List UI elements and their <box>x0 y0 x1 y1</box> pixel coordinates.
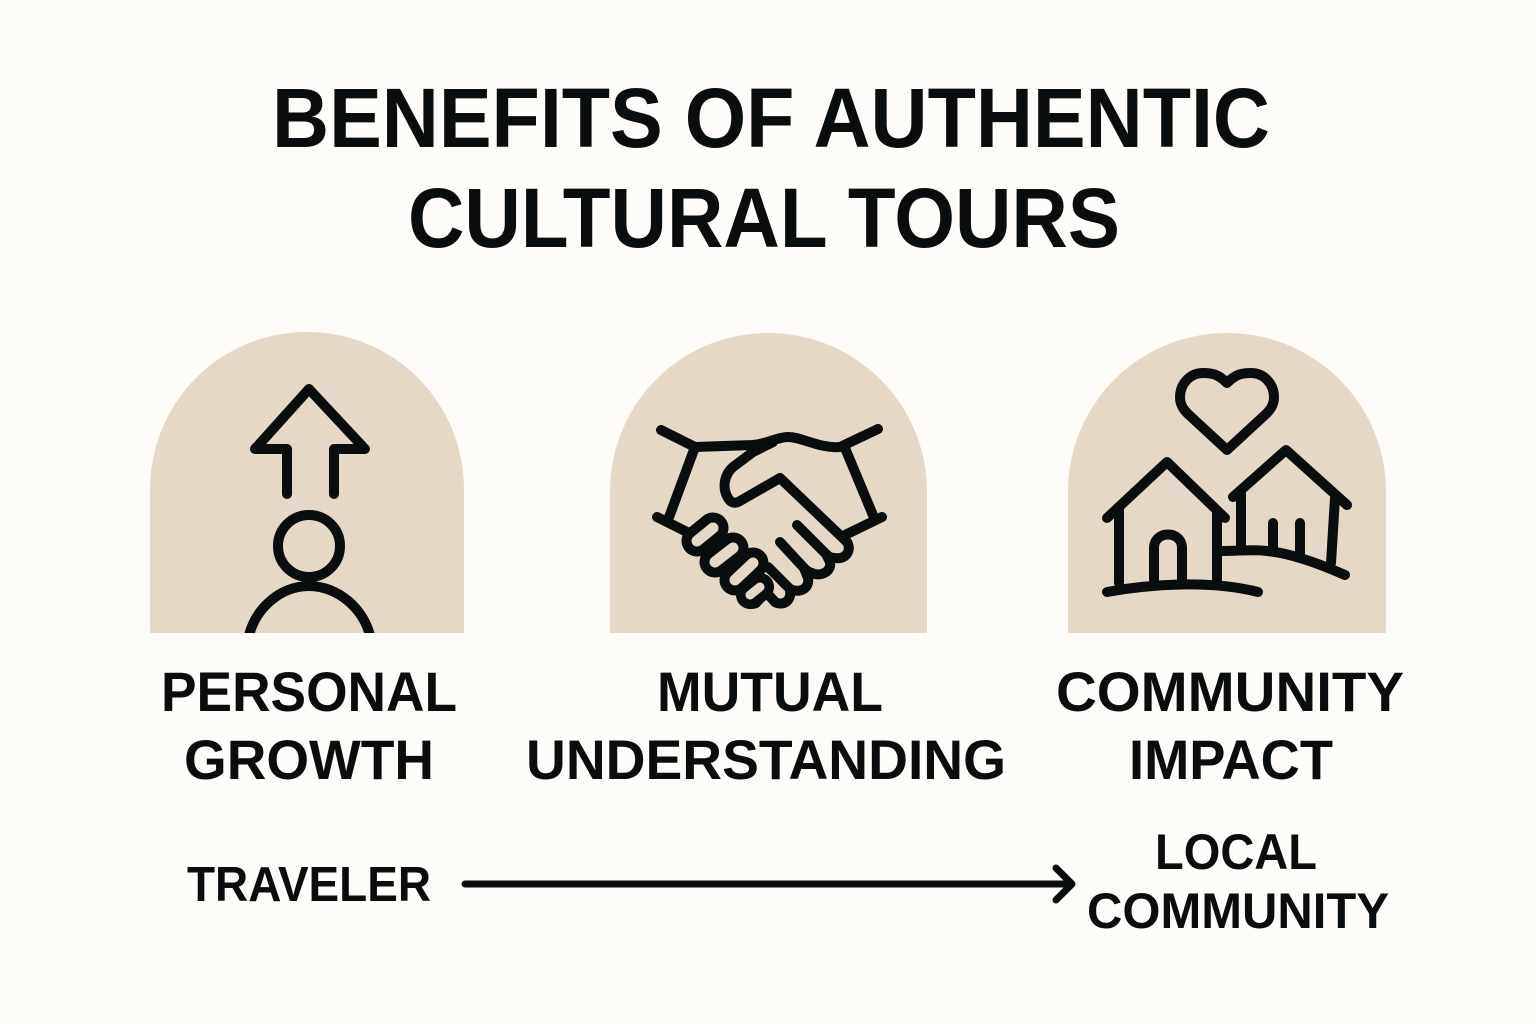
label: traveler: TRAVELER <box>187 858 431 912</box>
icon: person with up arrow <box>248 389 371 640</box>
finger capsules <box>697 528 760 595</box>
icon: handshake <box>657 429 882 604</box>
label: community impact: COMMUNITY <box>1056 660 1404 723</box>
label: community impact <box>1056 660 1404 791</box>
arch background <box>610 333 927 633</box>
label: mutual understanding <box>526 660 1006 791</box>
panel: mutual understanding <box>610 333 927 633</box>
arch background <box>1068 333 1386 633</box>
arch background <box>150 332 464 633</box>
panel: personal growth <box>150 332 464 640</box>
title: CULTURAL TOURS <box>408 171 1120 265</box>
arrow: traveler to local community <box>465 868 1072 900</box>
title: BENEFITS OF AUTHENTIC <box>272 71 1270 165</box>
label: personal growth: GROWTH <box>184 728 434 791</box>
label: personal growth: PERSONAL <box>161 660 457 723</box>
label: local community: COMMUNITY <box>1087 883 1389 939</box>
label: mutual understanding: UNDERSTANDING <box>526 728 1006 791</box>
label: mutual understanding: MUTUAL <box>657 660 883 723</box>
panel: community impact <box>1068 333 1386 633</box>
label: personal growth <box>161 660 457 791</box>
label: local community <box>1087 824 1389 939</box>
title <box>272 71 1270 265</box>
label: local community: LOCAL <box>1155 824 1317 880</box>
label: community impact: IMPACT <box>1129 728 1333 791</box>
icon: houses and heart <box>1107 373 1347 592</box>
